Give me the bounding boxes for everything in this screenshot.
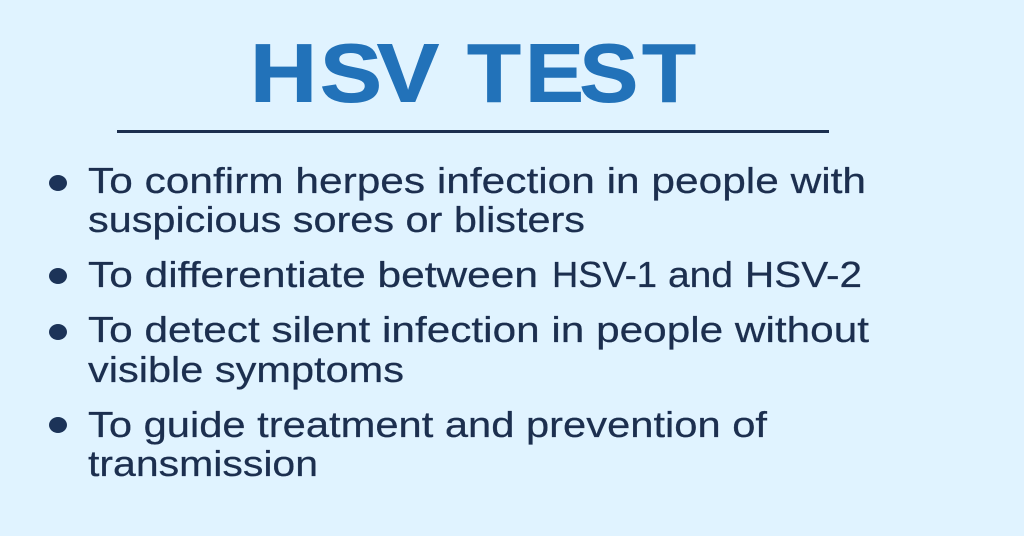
- bullet 2: [49, 254, 862, 295]
- bullet 1: suspicious sores or blisters: [88, 199, 585, 240]
- bullet 3: visible symptoms: [88, 349, 404, 390]
- bullet 2: To differentiate between: [88, 254, 538, 295]
- bullet list: [49, 160, 869, 484]
- bullet 1: [49, 160, 866, 240]
- title: TEST: [467, 28, 696, 120]
- title: HSV: [250, 26, 439, 119]
- title: [250, 26, 696, 120]
- bullet 4: [49, 404, 768, 484]
- bullet 2: HSV-2: [745, 254, 862, 295]
- bullet 3: [49, 309, 869, 390]
- bullet 4: transmission: [88, 443, 318, 484]
- bullet 3: To detect silent infection in people without: [88, 309, 869, 350]
- bullet 1: To confirm herpes infection in people with: [88, 160, 866, 201]
- bullet 2: HSV-1: [552, 254, 657, 295]
- bullet 2: and: [668, 254, 733, 295]
- bullet 4: To guide treatment and prevention of: [88, 404, 768, 445]
